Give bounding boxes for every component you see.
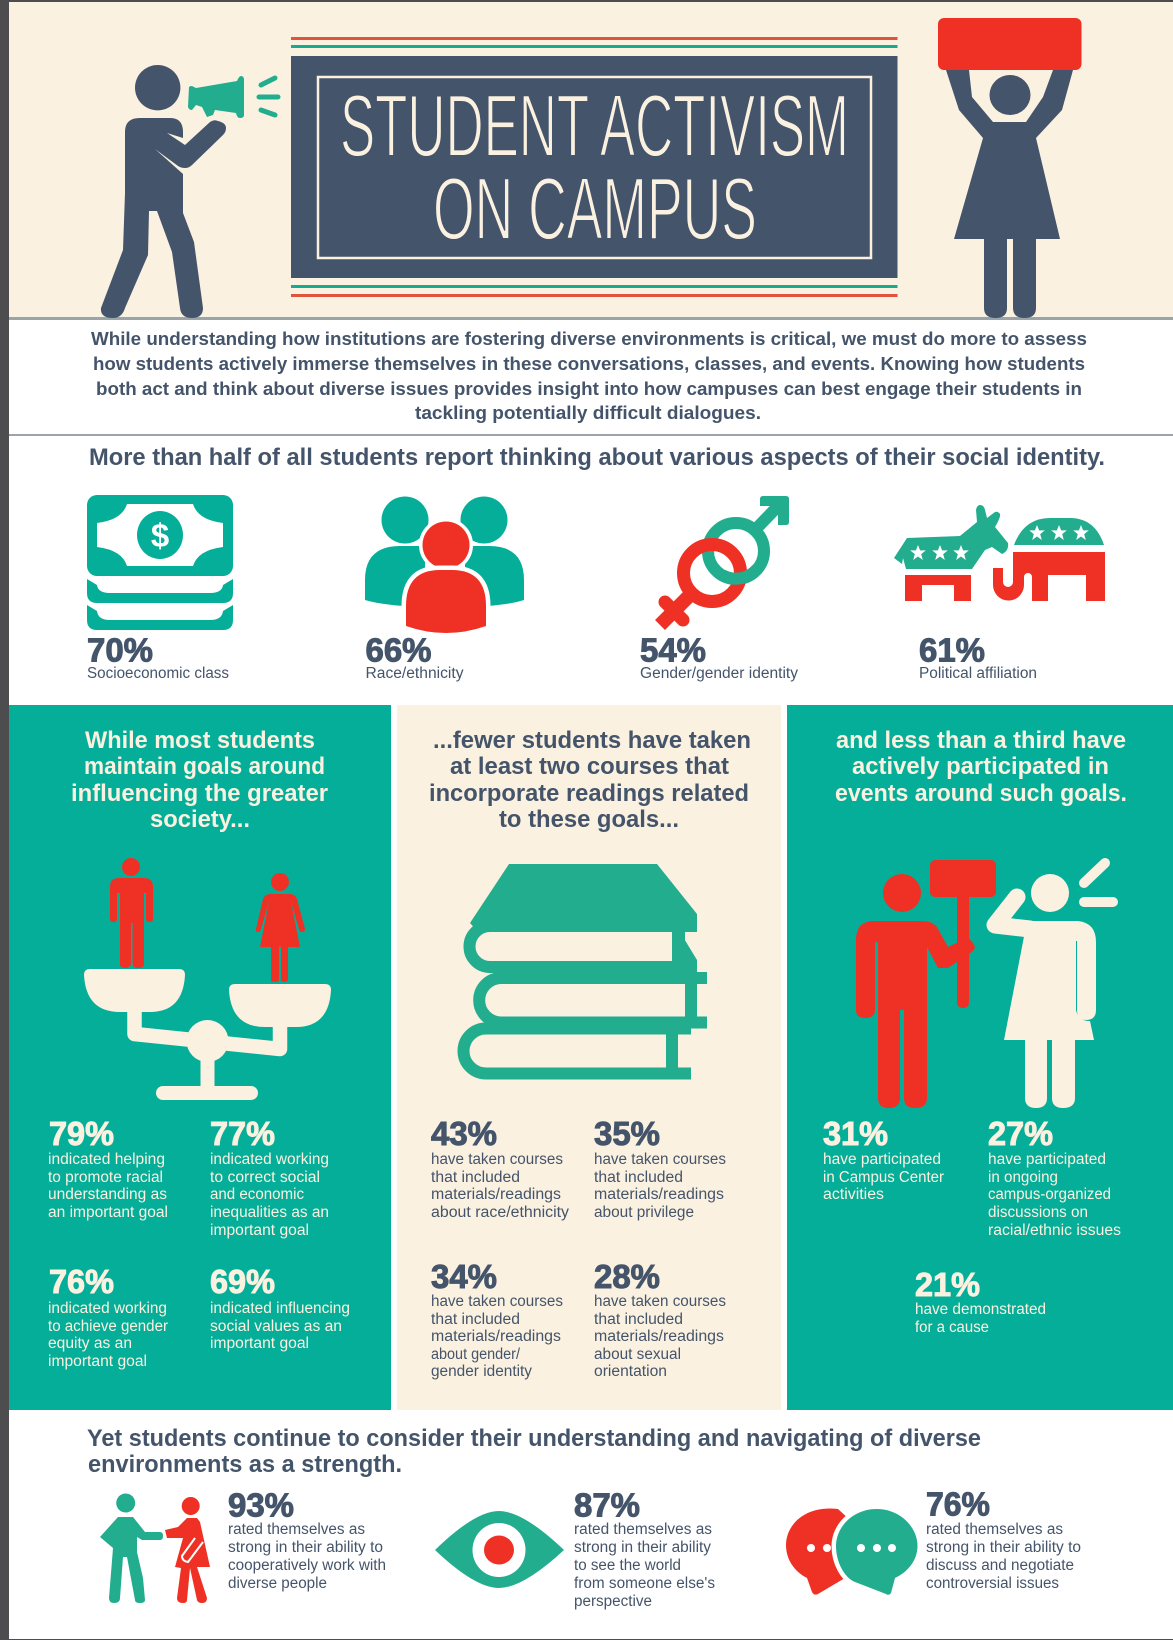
- stat: socioeconomic class: [87, 495, 233, 682]
- stat: 77%: 77%: [210, 1115, 275, 1152]
- header banner: [9, 2, 1173, 320]
- stat: 43%: [431, 1115, 569, 1221]
- stat: gender: [640, 496, 798, 682]
- section heading: strength: Yet students continue to consider their understanding and navigating of diverse: [87, 1425, 981, 1452]
- stat: 27%: racial/ethnic issues: [988, 1222, 1121, 1239]
- stat: 76%: equity as an: [48, 1335, 132, 1352]
- icon: eye: [435, 1511, 564, 1588]
- intro paragraph: [91, 328, 1087, 423]
- stat: 31%: in Campus Center: [823, 1169, 944, 1186]
- stat: 27%: [988, 1115, 1121, 1239]
- stat: 69%: important goal: [210, 1335, 309, 1352]
- panel heading: actively participated in: [852, 753, 1109, 780]
- stat: 35%: have taken courses: [594, 1151, 726, 1168]
- stat: 77%: and economic: [210, 1186, 304, 1203]
- stat: 79%: 79%: [49, 1115, 114, 1152]
- stat: 35%: about privilege: [594, 1204, 694, 1221]
- panel heading: [835, 727, 1127, 807]
- stat: 69%: 69%: [210, 1263, 275, 1300]
- intro paragraph: both act and think about diverse issues provides insight into how campuses can best engage their students in: [96, 378, 1082, 399]
- stat: 27%: discussions on: [988, 1204, 1088, 1221]
- stat: political affiliation: [894, 505, 1105, 682]
- stat: 76%: important goal: [48, 1353, 147, 1370]
- stat: 27%: campus-organized: [988, 1186, 1111, 1203]
- stat: 28%: 28%: [594, 1258, 660, 1295]
- stat: 35%: materials/readings: [594, 1186, 724, 1203]
- icon: two people shaking hands: [100, 1494, 210, 1603]
- icon: balance scale with man and woman: [84, 858, 331, 1100]
- icon: speech bubbles: [786, 1508, 918, 1595]
- stat: 35%: [594, 1115, 726, 1221]
- stat: 87% perspective: 87%: [574, 1486, 640, 1524]
- stat: 76%: indicated working: [48, 1300, 167, 1317]
- stat: 31%: activities: [823, 1186, 884, 1203]
- panel heading: events around such goals.: [835, 780, 1127, 807]
- stat: 79%: to promote racial: [48, 1169, 163, 1186]
- stat: 28%: that included: [594, 1311, 683, 1328]
- stat: race/ethnicity: Race/ethnicity: [366, 665, 464, 682]
- stat: gender: 54%: [640, 632, 706, 668]
- stat: 35%: that included: [594, 1169, 683, 1186]
- stat: political affiliation: Political affiliation: [919, 665, 1037, 682]
- icon: stack of books: [464, 864, 707, 1074]
- stat: 28%: orientation: [594, 1363, 667, 1380]
- stat: 28%: materials/readings: [594, 1328, 724, 1345]
- stat: 76% discussion: 76%: [926, 1486, 990, 1522]
- stat: 34%: that included: [431, 1311, 520, 1328]
- stat: 77%: to correct social: [210, 1169, 320, 1186]
- stat: 87% perspective: [435, 1486, 715, 1610]
- stat: 93% cooperative work: cooperatively work with: [228, 1557, 386, 1574]
- stat: 21%: for a cause: [915, 1319, 989, 1336]
- section heading: strength: [87, 1425, 981, 1478]
- stat: 21%: have demonstrated: [915, 1301, 1046, 1318]
- stat: 76% discussion: strong in their ability to: [926, 1539, 1081, 1556]
- stat: 76% discussion: controversial issues: [926, 1575, 1059, 1592]
- stat: 77%: indicated working: [210, 1151, 329, 1168]
- panel heading: society...: [150, 806, 250, 833]
- stat: 34%: [431, 1258, 563, 1380]
- stat: 34%: gender identity: [431, 1363, 532, 1380]
- stat: 28%: about sexual: [594, 1346, 681, 1363]
- stat: 43%: about race/ethnicity: [431, 1204, 569, 1221]
- icon: three people: [365, 496, 524, 633]
- stat: 77%: [210, 1115, 329, 1239]
- stat: 76% discussion: discuss and negotiate: [926, 1557, 1074, 1574]
- stat: 87% perspective: perspective: [574, 1593, 652, 1610]
- intro paragraph: tackling potentially difficult dialogues.: [415, 402, 761, 423]
- title text: STUDENT ACTIVISM: [340, 76, 849, 175]
- stat: 76%: to achieve gender: [48, 1318, 168, 1335]
- title block: ON CAMPUS: [433, 159, 757, 258]
- stat: 93% cooperative work: diverse people: [228, 1575, 327, 1592]
- panel heading: While most students: [85, 727, 315, 754]
- stat: 77%: inequalities as an: [210, 1204, 329, 1221]
- stat: 28%: have taken courses: [594, 1293, 726, 1310]
- stat: 35%: 35%: [594, 1115, 660, 1152]
- panel: courses: [397, 705, 781, 1410]
- panel heading: maintain goals around: [84, 753, 325, 780]
- panel heading: incorporate readings related: [429, 780, 749, 807]
- panel heading: [71, 727, 328, 833]
- stat: 76%: [48, 1263, 168, 1370]
- stat: 28%: [594, 1258, 726, 1380]
- stat: 79%: [48, 1115, 168, 1221]
- stat: 87% perspective: to see the world: [574, 1557, 681, 1574]
- stat: 27%: in ongoing: [988, 1169, 1058, 1186]
- stat: 43%: that included: [431, 1169, 520, 1186]
- panel heading: [429, 727, 751, 833]
- intro paragraph: how students actively immerse themselves in these conversations, classes, and events. Knowing how students: [93, 353, 1085, 374]
- stat: 77%: important goal: [210, 1222, 309, 1239]
- title block: [291, 37, 898, 297]
- stat: 69%: social values as an: [210, 1318, 342, 1335]
- icon: man with megaphone: [101, 65, 278, 318]
- stat: race/ethnicity: 66%: [366, 632, 432, 668]
- stat: 93% cooperative work: [100, 1486, 386, 1603]
- stat: 79%: indicated helping: [48, 1151, 165, 1168]
- panel: goals: [9, 705, 391, 1410]
- stat: 93% cooperative work: 93%: [228, 1486, 294, 1524]
- panel heading: to these goals...: [499, 806, 679, 833]
- icon: megaphone: [188, 76, 278, 118]
- stat: 76%: 76%: [49, 1263, 114, 1300]
- panel heading: influencing the greater: [71, 780, 328, 807]
- stat: 34%: have taken courses: [431, 1293, 563, 1310]
- panel heading: and less than a third have: [836, 727, 1126, 754]
- stat: 34%: 34%: [431, 1258, 497, 1295]
- icon: woman holding sign: [938, 18, 1082, 318]
- stat: socioeconomic class: Socioeconomic class: [87, 665, 229, 682]
- stat: 87% perspective: from someone else's: [574, 1575, 715, 1592]
- icon: stack of money: $: [151, 517, 169, 554]
- stat: 21%: [915, 1266, 1046, 1336]
- stat: 34%: materials/readings: [431, 1328, 561, 1345]
- icon: donkey and elephant: [894, 505, 1105, 601]
- panel heading: ...fewer students have taken: [433, 727, 751, 754]
- icon: man with protest sign and woman thinking: [856, 860, 1113, 1108]
- panel heading: at least two courses that: [450, 753, 729, 780]
- stat: 69%: [210, 1263, 350, 1352]
- stat: 43%: have taken courses: [431, 1151, 563, 1168]
- stat: 31%: [823, 1115, 944, 1203]
- stat: race/ethnicity: [365, 496, 524, 682]
- stat: 79%: an important goal: [48, 1204, 168, 1221]
- icon: interlocked gender symbols: [660, 496, 789, 625]
- stat: 93% cooperative work: strong in their ability to: [228, 1539, 383, 1556]
- stat: political affiliation: 61%: [919, 632, 985, 668]
- stat: 79%: understanding as: [48, 1186, 167, 1203]
- stat: 27%: 27%: [988, 1115, 1053, 1152]
- icon: stack of money: [87, 495, 233, 630]
- stat: 27%: have participated: [988, 1151, 1106, 1168]
- stat: 43%: materials/readings: [431, 1186, 561, 1203]
- stat: 87% perspective: strong in their ability: [574, 1539, 711, 1556]
- stat: gender: Gender/gender identity: [640, 665, 798, 682]
- stat: 69%: indicated influencing: [210, 1300, 350, 1317]
- stat: 87% perspective: rated themselves as: [574, 1521, 712, 1538]
- stat: 34%: about gender/: [431, 1346, 521, 1363]
- stat: socioeconomic class: 70%: [87, 632, 153, 668]
- stat: 43%: 43%: [431, 1115, 497, 1152]
- section heading: social identity: More than half of all students report thinking about various aspects of their social identity.: [89, 444, 1105, 471]
- panel: events: [787, 705, 1173, 1410]
- stat: 76% discussion: rated themselves as: [926, 1521, 1063, 1538]
- section heading: strength: environments as a strength.: [88, 1451, 402, 1478]
- intro paragraph: While understanding how institutions are fostering diverse environments is critical, we must do more to assess: [91, 328, 1087, 349]
- stat: 76% discussion: [786, 1486, 1081, 1595]
- stat: 31%: have participated: [823, 1151, 941, 1168]
- stat: 21%: 21%: [915, 1266, 980, 1303]
- stat: 31%: 31%: [823, 1115, 888, 1152]
- stat: 93% cooperative work: rated themselves as: [228, 1521, 365, 1538]
